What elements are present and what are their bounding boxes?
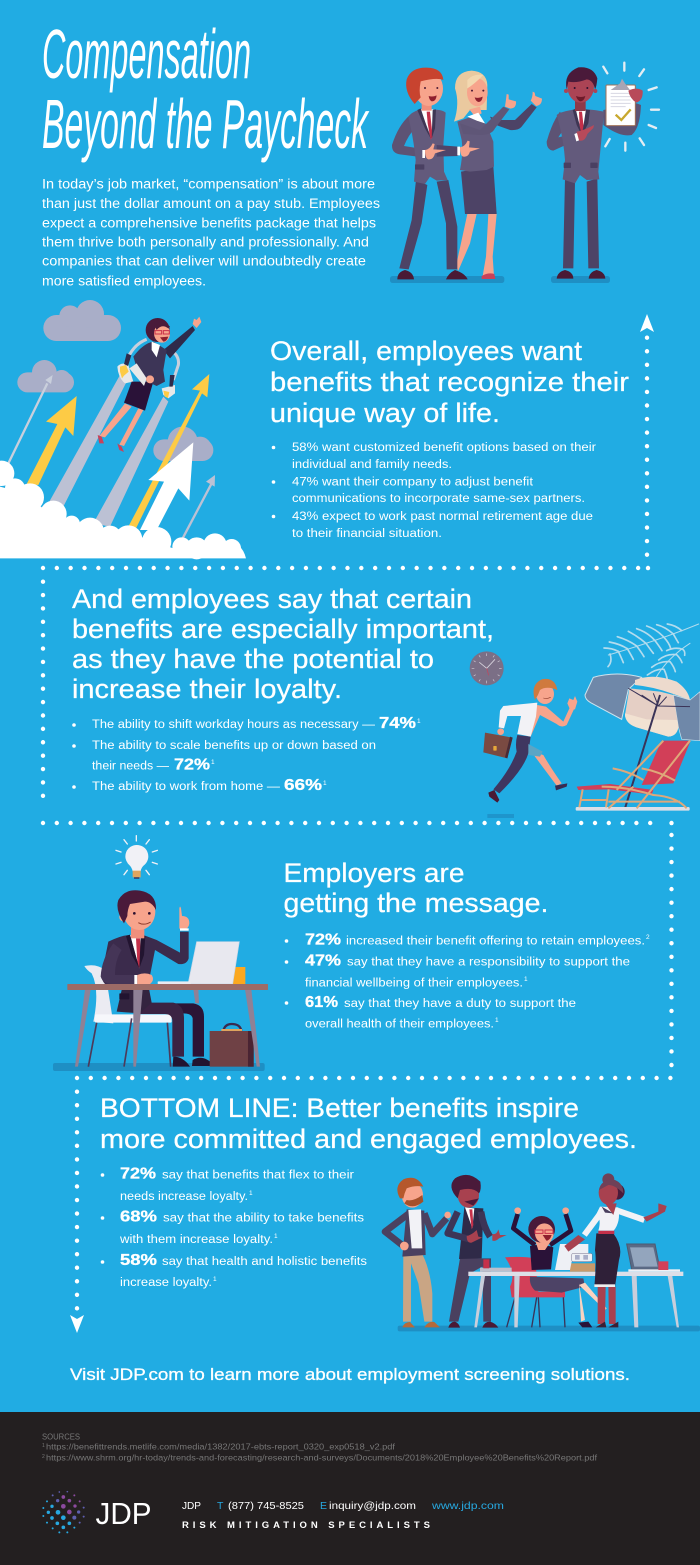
section heading: employers [284,858,548,918]
bullet list: bottom line: with them increase loyalty. [119,1234,273,1246]
bullet list: overall: to their financial situation. [292,528,442,540]
bullet list: loyalty: their needs — [92,760,170,772]
bullet list: employers: 1 [495,1017,499,1024]
bullet list: overall: communications to incorporate same-sex partners. [292,493,585,505]
contact details [182,1500,504,1512]
bullet list: employers: increased their benefit offering to retain employees. [346,936,645,948]
clouds [17,300,213,461]
bullet list: employers [285,932,650,1030]
woman on jetpack [98,317,201,452]
intro paragraph: companies that can deliver will undoubtedly create [42,254,366,268]
laptop and mug [158,942,245,984]
standing woman [564,1173,667,1327]
sources: https://www.shrm.org/hr-today/trends-and-forecasting/research-and-surveys/Documents/2018%20Employee%20Benefits%20Report.pdf [46,1452,598,1462]
section heading: loyalty: as they have the potential to [72,644,434,674]
bullet list: employers: 72% [305,932,341,948]
section heading: employers: getting the message. [284,888,548,918]
illustration: woman with jetpack above rising arrows and clouds [0,300,246,559]
section heading: loyalty: benefits are especially important, [72,614,494,644]
bullet list: overall: 58% want customized benefit options based on their [292,442,596,454]
sources [42,1432,598,1462]
bullet list: bottom line: say that the ability to take benefits [163,1212,364,1224]
bullet list: bottom line: 58% [120,1252,157,1269]
intro paragraph: them thrive both personally and professionally. And [42,234,369,250]
bullet list: loyalty [72,715,421,794]
logo: JDP: JDP [96,1496,152,1531]
white cloud [0,461,246,559]
section heading: overall: benefits that recognize their [270,367,629,397]
section heading: loyalty: And employees say that certain [72,584,472,614]
text: Beyond the Paycheck [42,85,369,163]
section heading: loyalty: increase their loyalty. [72,674,342,704]
contact details: T [217,1500,224,1512]
bullet list: loyalty: 74% [379,715,416,732]
rising arrows [8,374,215,538]
table with chair and items [468,1244,683,1327]
black man with pointing hand [448,1175,507,1328]
dotted path connector with arrows [43,314,672,1333]
bullet list: overall [272,442,596,540]
sources: 1 [42,1443,45,1449]
section heading: employers: Employers are [284,858,464,888]
bullet list: bottom line: 1 [274,1233,278,1240]
contact details: www.jdp.com [431,1500,504,1512]
bullet list: employers: 1 [524,976,528,983]
contact details: JDP [182,1500,201,1512]
bullet list: bottom line: 1 [213,1276,217,1283]
bullet list: employers: say that they have a responsibility to support the [347,956,630,968]
bullet list: loyalty: The ability to shift workday hours as necessary — [92,719,376,731]
bullet list: loyalty: 1 [417,718,421,725]
palm leaves [604,624,699,680]
contact details: E [320,1500,327,1512]
section heading: loyalty [72,584,494,704]
bullet list: loyalty: 1 [211,759,215,766]
call to action: Visit JDP.com to learn more about employment screening solutions. [70,1365,630,1384]
intro paragraph: In today’s job market, “compensation” is about more [42,176,375,192]
wall clock [470,651,504,685]
lightbulb [116,836,157,879]
bullet list: overall: 47% want their company to adjust benefit [292,476,534,488]
man with clipboard [547,67,643,279]
bullet list: employers: 2 [646,934,650,941]
desk [67,984,268,1067]
title: Compensation [42,15,251,93]
section heading: bottom line: more committed and engaged employees. [100,1124,637,1154]
beach umbrella [585,674,700,808]
bullet list: employers: say that they have a duty to support the [344,998,576,1010]
section heading: overall: Overall, employees want [270,336,583,366]
bullet list: employers: financial wellbeing of their employees. [305,978,523,990]
illustration: running man, clock, beach umbrella and chair [470,624,700,818]
bullet list: bottom line: 68% [120,1208,157,1226]
sources: 2 [42,1454,45,1460]
intro paragraph: expect a comprehensive benefits package that helps [42,216,376,230]
beach chair [576,741,691,811]
bullet list: bottom line: say that health and holistic benefits [162,1256,367,1268]
bullet list: overall: individual and family needs. [292,459,452,471]
section heading: overall [270,336,629,428]
bullet list: bottom line [101,1166,367,1289]
footer band [0,1412,700,1565]
bullet list: employers: overall health of their employees. [305,1018,494,1030]
bullet list: bottom line: 72% [120,1166,156,1182]
bullet list: loyalty: The ability to scale benefits up or down based on [92,740,376,752]
bullet list: loyalty: 72% [174,756,210,774]
section heading: bottom line: BOTTOM LINE: Better benefits inspire [100,1093,579,1123]
bullet list: employers: 47% [305,952,341,970]
bullet list: loyalty: The ability to work from home — [92,781,281,793]
illustration: three business people with clipboard [390,63,659,283]
bullet list: overall: 43% expect to work past normal retirement age due [292,511,593,523]
bearded man [385,1178,451,1327]
briefcase [210,1024,254,1067]
sources: https://benefittrends.metlife.com/media/1382/2017-ebts-report_0320_exp0518_v2.pdf [46,1442,396,1452]
seated woman with raised arms [513,1207,607,1327]
title [42,15,369,163]
intro paragraph: than just the dollar amount on a pay stub. Employees [42,196,380,211]
bullet list: loyalty: 66% [284,777,322,794]
running man [483,679,577,818]
bullet list: employers: 61% [305,994,338,1011]
contact details: (877) 745-8525 [228,1500,304,1512]
bullet list: loyalty: 1 [323,780,327,787]
bullet list: bottom line: 1 [249,1190,253,1197]
contact details: inquiry@jdp.com [329,1500,416,1512]
bullet list: bottom line: needs increase loyalty. [120,1191,248,1203]
section heading: overall: unique way of life. [270,398,500,428]
bullet list: bottom line: say that benefits that flex to their [162,1170,354,1182]
sources: SOURCES [42,1432,80,1442]
illustration: celebrating team at office table [385,1173,700,1331]
illustration: man at desk with lightbulb idea [53,836,268,1071]
intro paragraph: more satisfied employees. [42,274,206,288]
logo: JDP [42,1491,152,1533]
tagline: RISK MITIGATION SPECIALISTS [182,1520,430,1531]
intro paragraph [42,176,380,288]
section heading: bottom line [100,1093,637,1154]
bullet list: bottom line: increase loyalty. [120,1277,212,1289]
